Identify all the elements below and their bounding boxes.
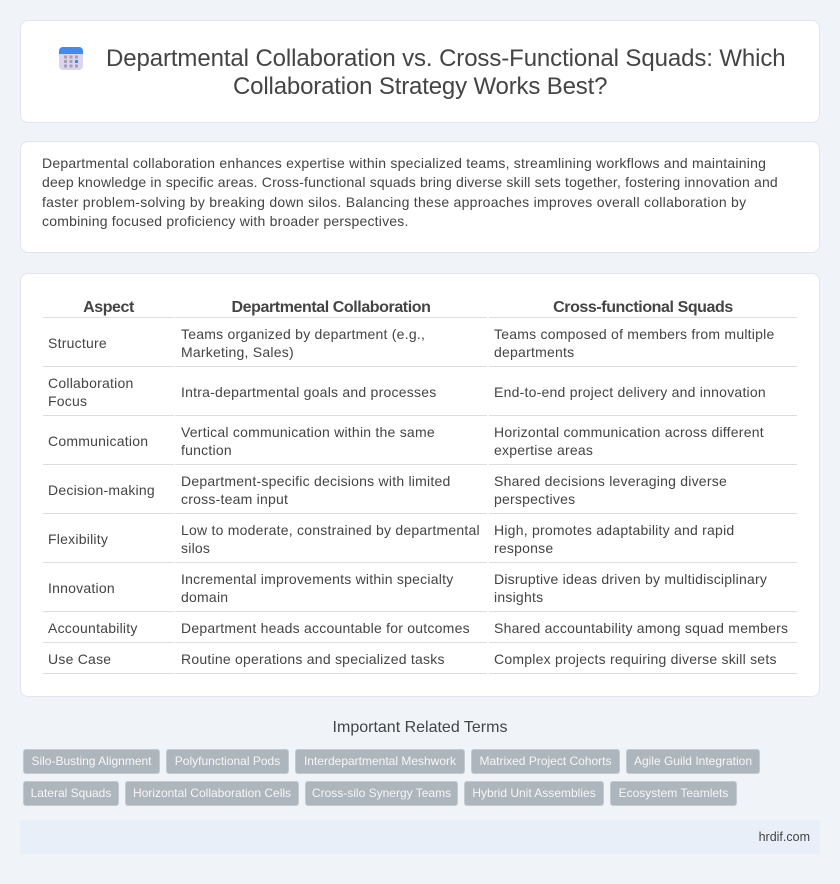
row: accountability: Shared accountability among squad members: [494, 620, 788, 636]
row: decision-making: Shared decisions leveraging diverse: [494, 473, 727, 489]
tag: [166, 749, 289, 774]
row: innovation: Innovation: [48, 580, 115, 596]
related terms tags: [23, 749, 760, 806]
row: innovation: domain: [181, 589, 228, 605]
row: collaboration focus: Collaboration: [48, 375, 134, 391]
tag: Interdepartmental Meshwork: [304, 754, 456, 768]
tag: Ecosystem Teamlets: [619, 786, 728, 800]
title: [106, 45, 786, 100]
tag: [305, 781, 458, 806]
tag: [626, 749, 760, 774]
row: communication: function: [181, 442, 232, 458]
row: structure: Teams composed of members from multiple: [494, 326, 775, 342]
row: use case: Routine operations and specialized tasks: [181, 651, 445, 667]
tag: Polyfunctional Pods: [175, 754, 280, 768]
row: use case: Use Case: [48, 651, 111, 667]
header: cross-functional squads: Cross-functional Squads: [553, 299, 733, 316]
related terms heading: Important Related Terms: [333, 719, 507, 736]
tag: Lateral Squads: [31, 786, 111, 800]
row: decision-making: cross-team input: [181, 491, 288, 507]
row: structure: Structure: [48, 335, 107, 351]
footer bar: [20, 820, 820, 854]
row: flexibility: Flexibility: [48, 531, 108, 547]
tag: [125, 781, 299, 806]
row: flexibility: silos: [181, 540, 210, 556]
footer source: hrdif.com: [759, 830, 810, 844]
comparison table panel: [20, 273, 820, 697]
row: innovation: Disruptive ideas driven by multidisciplinary: [494, 571, 767, 587]
row: decision-making: Department-specific decisions with limited: [181, 473, 451, 489]
table: [43, 299, 797, 674]
summary panel: [20, 141, 820, 253]
tag: Silo-Busting Alignment: [31, 754, 152, 768]
summary text: Departmental collaboration enhances expertise within specialized teams, streamlining workflows and maintaining: [42, 155, 766, 171]
row: flexibility: High, promotes adaptability and rapid: [494, 522, 734, 538]
summary text: deep knowledge in specific areas. Cross-functional squads bring diverse skill sets together, fostering innovation and: [42, 174, 778, 190]
tag: [295, 749, 465, 774]
tag: [610, 781, 737, 806]
tag: Matrixed Project Cohorts: [479, 754, 612, 768]
row: communication: expertise areas: [494, 442, 593, 458]
row: accountability: Department heads accountable for outcomes: [181, 620, 470, 636]
header panel: [20, 20, 820, 123]
summary text: [42, 155, 778, 229]
row: innovation: insights: [494, 589, 543, 605]
row: use case: Complex projects requiring diverse skill sets: [494, 651, 777, 667]
header: aspect: Aspect: [83, 299, 134, 316]
row: accountability: [48, 620, 788, 636]
row: communication: Vertical communication within the same: [181, 424, 435, 440]
title: Departmental Collaboration vs. Cross-Functional Squads: Which: [106, 45, 786, 72]
tag: [23, 781, 119, 806]
row: accountability: Accountability: [48, 620, 138, 636]
tag: Hybrid Unit Assemblies: [472, 786, 596, 800]
tag: [23, 749, 160, 774]
row: decision-making: perspectives: [494, 491, 575, 507]
row: flexibility: Low to moderate, constrained by departmental: [181, 522, 480, 538]
row: flexibility: response: [494, 540, 553, 556]
row: collaboration focus: Intra-departmental goals and processes: [181, 384, 436, 400]
row: innovation: Incremental improvements within specialty: [181, 571, 453, 587]
summary text: faster problem-solving by breaking down silos. Balancing these approaches improves overall collaboration by: [42, 194, 746, 210]
row: structure: Marketing, Sales): [181, 344, 294, 360]
row: collaboration focus: [48, 375, 766, 409]
row: collaboration focus: Focus: [48, 393, 87, 409]
row: innovation: [48, 571, 767, 605]
row: structure: [48, 326, 775, 360]
row: structure: Teams organized by department (e.g.,: [181, 326, 425, 342]
row: decision-making: Decision-making: [48, 482, 155, 498]
row: decision-making: [48, 473, 727, 507]
row: use case: [48, 651, 777, 667]
tag: [471, 749, 620, 774]
row: structure: departments: [494, 344, 574, 360]
tag: Agile Guild Integration: [634, 754, 752, 768]
row: communication: [48, 424, 764, 458]
header: departmental collaboration: Departmental Collaboration: [232, 299, 430, 316]
summary text: combining focused proficiency with broader perspectives.: [42, 213, 409, 229]
tag: [464, 781, 604, 806]
title: Collaboration Strategy Works Best?: [233, 73, 607, 100]
row: communication: Horizontal communication across different: [494, 424, 764, 440]
tag: Cross-silo Synergy Teams: [312, 786, 451, 800]
row: communication: Communication: [48, 433, 148, 449]
tag: Horizontal Collaboration Cells: [133, 786, 291, 800]
icon: calendar: [59, 47, 83, 70]
row: flexibility: [48, 522, 734, 556]
row: collaboration focus: End-to-end project delivery and innovation: [494, 384, 766, 400]
